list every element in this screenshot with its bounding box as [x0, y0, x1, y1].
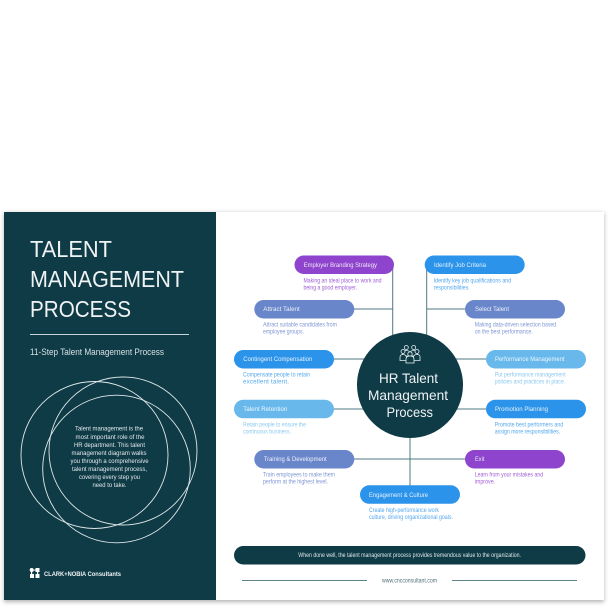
step: Training & Development: perform at the highest level.	[263, 478, 328, 485]
hub title: Process	[386, 404, 433, 420]
hub title: Management	[368, 387, 448, 403]
title: PROCESS	[30, 296, 131, 322]
step: Identify Job Criteria: Identify Job Criteria	[434, 262, 486, 269]
hub title: HR Talent	[379, 370, 438, 386]
icon: logo mark	[30, 568, 40, 578]
step: Engagement & Culture	[360, 485, 460, 521]
intro paragraph: need to take.	[92, 482, 127, 489]
panel: left intro	[4, 212, 216, 600]
step: Employer Branding Strategy: Employer Branding Strategy	[304, 262, 378, 269]
step: Employer Branding Strategy: Making an ideal place to work and	[304, 277, 382, 284]
step: Talent Retention	[234, 400, 334, 435]
step: Attract Talent	[254, 300, 354, 335]
step: Contingent Compensation: excellent talent.	[243, 378, 289, 385]
step: Promotion Planning: Promotion Planning	[495, 406, 548, 413]
step: Promotion Planning: assign more responsibilities.	[495, 428, 560, 435]
step: Performance Management: Performance Management	[495, 356, 565, 363]
closing banner: When done well, the talent management process provides tremendous value to the organization.	[298, 553, 521, 559]
step: Exit	[465, 450, 565, 485]
step: Employer Branding Strategy	[294, 256, 394, 291]
title: TALENT	[30, 236, 112, 262]
brand logo	[30, 568, 121, 578]
step: Identify Job Criteria: responsibilities.	[434, 284, 470, 291]
icon: people group	[400, 346, 420, 363]
intro paragraph: Talent management is the	[75, 426, 143, 432]
step: Select Talent: Making data-driven selection based	[475, 321, 557, 328]
intro paragraph: you through a comprehensive	[70, 458, 149, 465]
step: Engagement & Culture: culture, driving organizational goals.	[369, 514, 453, 521]
step: Attract Talent: employee groups.	[263, 328, 304, 335]
step: Engagement & Culture: Engagement & Culture	[369, 492, 428, 499]
footer website: www.cncconsultant.com	[381, 578, 437, 584]
intro paragraph: management diagram walks	[72, 450, 147, 457]
step: Performance Management	[486, 350, 586, 385]
step: Contingent Compensation: Compensate people to retain	[243, 371, 310, 378]
step: Training & Development	[254, 450, 354, 485]
step: Attract Talent: Attract Talent	[263, 306, 300, 313]
intro paragraph: HR department. This talent	[74, 442, 145, 449]
title: MANAGEMENT	[30, 266, 184, 292]
step: Select Talent	[465, 300, 565, 335]
title	[30, 236, 184, 322]
card shadow	[4, 213, 604, 602]
step: Engagement & Culture: Create high-performance work	[369, 507, 440, 514]
step: Performance Management: policies and practices in place.	[495, 378, 565, 385]
step: Performance Management: Put performance management	[495, 371, 566, 378]
diagram connectors	[334, 265, 486, 486]
overlapping circles	[21, 377, 197, 543]
step: Exit: Exit	[475, 456, 485, 463]
step: Contingent Compensation	[234, 350, 334, 385]
step: Promotion Planning: Promote best performers and	[495, 421, 564, 428]
step: Contingent Compensation: Contingent Compensation	[243, 356, 313, 363]
step: Exit: Learn from your mistakes and	[475, 471, 544, 478]
closing banner	[234, 546, 586, 564]
card background	[4, 212, 604, 600]
title divider	[30, 334, 189, 335]
step: Select Talent: Select Talent	[475, 306, 509, 313]
hub title	[368, 370, 448, 420]
step: Talent Retention: continuous business.	[243, 428, 291, 435]
intro paragraph: covering every step you	[79, 474, 140, 481]
step: Identify Job Criteria	[425, 256, 525, 291]
step: Talent Retention: Retain people to ensure the	[243, 421, 306, 428]
step: Exit: improve.	[475, 478, 495, 485]
step: Select Talent: on the best performance.	[475, 328, 533, 335]
step: Employer Branding Strategy: being a good employer.	[304, 284, 357, 291]
subtitle: 11-Step Talent Management Process	[30, 347, 164, 357]
step: Attract Talent: Attract suitable candidates from	[263, 321, 337, 328]
intro paragraph: talent management process,	[72, 466, 147, 473]
step: Identify Job Criteria: Identify key job qualifications and	[434, 277, 512, 284]
step: Training & Development: Training & Development	[264, 456, 327, 463]
step: Training & Development: Train employees to make them	[263, 471, 335, 478]
step: Promotion Planning	[486, 400, 586, 435]
intro paragraph	[70, 426, 149, 489]
central hub	[357, 332, 463, 438]
step: Talent Retention: Talent Retention	[243, 406, 288, 413]
intro paragraph: most important role of the	[76, 434, 145, 441]
brand name: CLARK+NOBIA Consultants	[44, 571, 121, 578]
